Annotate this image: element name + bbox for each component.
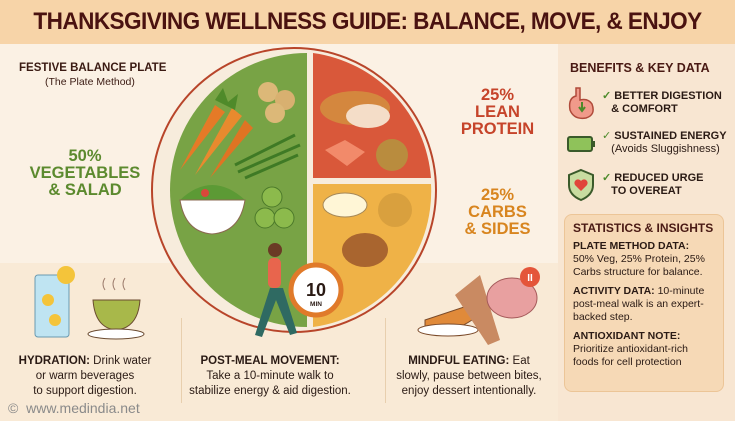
- label: 25% carbs: CARBS: [468, 203, 527, 221]
- text: post-meal movement: Take a 10-minute walk to: [206, 370, 334, 382]
- label: 25% carbs: & SIDES: [464, 220, 531, 238]
- benefit: digestion: & COMFORT: [611, 103, 678, 115]
- label: 50% vegetables: VEGETABLES: [30, 164, 140, 182]
- label: 25% lean protein: 25%: [481, 86, 514, 104]
- text: hydration: [19, 355, 152, 397]
- label: 25% carbs: 25%: [481, 186, 514, 204]
- food: sprouts: [255, 187, 294, 228]
- text: hydration: or warm beverages: [36, 370, 134, 382]
- benefit: overeat: ✓ REDUCED URGE: [602, 172, 704, 184]
- benefit: overeat: TO OVEREAT: [611, 185, 682, 197]
- label: 50% vegetables: [30, 147, 140, 199]
- heading: benefits: BENEFITS & KEY DATA: [570, 61, 710, 75]
- benefit: overeat: [568, 168, 704, 202]
- header band: [0, 0, 735, 44]
- stat: plate method: 50% Veg, 25% Protein, 25% Carbs structure for balance.: [573, 253, 705, 278]
- benefit: energy: ✓ SUSTAINED ENERGY: [602, 130, 727, 142]
- text: mindful eating: enjoy dessert intentionally.: [402, 385, 536, 397]
- stat: plate method: PLATE METHOD DATA:: [573, 240, 689, 252]
- label: 25% lean protein: [461, 86, 534, 138]
- label: 25% lean protein: PROTEIN: [461, 120, 534, 138]
- food: salmon and lentils: [325, 139, 408, 171]
- bottom band background: [0, 263, 558, 421]
- text: post-meal movement: POST-MEAL MOVEMENT:: [200, 355, 340, 367]
- label: 25% carbs: [464, 186, 531, 238]
- heading: festive balance plate: FESTIVE BALANCE PLATE: [19, 62, 166, 74]
- stopwatch 10 min: 10: [306, 280, 326, 300]
- food: potatoes: [258, 82, 295, 123]
- label: 50% vegetables: & SALAD: [48, 181, 122, 199]
- text: hydration: HYDRATION: Drink water: [19, 355, 151, 367]
- icon: water glass: [35, 266, 75, 337]
- text: hydration: to support digestion.: [33, 385, 137, 397]
- subheading: (The Plate Method): [45, 76, 135, 88]
- stopwatch 10 min: MIN: [310, 301, 322, 308]
- label: 25% lean protein: LEAN: [475, 103, 520, 121]
- stopwatch 10 min: [291, 265, 341, 315]
- food: mashed potatoes, stuffing, bread: [323, 193, 412, 267]
- title: THANKSGIVING WELLNESS GUIDE: BALANCE, MOVE, & ENJOY: [33, 8, 702, 35]
- food: salad bowl: [180, 185, 245, 234]
- panel: statistics & insights: [564, 214, 724, 392]
- benefit: digestion: [568, 87, 722, 120]
- stat: antioxidant: ANTIOXIDANT NOTE:: [573, 330, 680, 342]
- text: post-meal movement: stabilize energy & aid digestion.: [189, 385, 351, 397]
- right panel background: [558, 44, 735, 421]
- stat: activity: ACTIVITY DATA: 10-minute post-meal walk is an expert-backed step.: [573, 285, 704, 323]
- text: mindful eating: slowly, pause between bites,: [396, 370, 542, 382]
- text: mindful eating: [396, 355, 542, 397]
- benefit: energy: [567, 130, 727, 155]
- runner figure: [255, 243, 297, 337]
- icon: tea cup: [88, 278, 144, 339]
- text: post-meal movement: [189, 355, 351, 397]
- footer credit: © www.medindia.net: [8, 400, 140, 416]
- stat: plate method: [573, 240, 705, 278]
- panel: benefits: [567, 61, 727, 202]
- plate: [34, 47, 540, 345]
- icon: pie, fork and brain: [418, 267, 540, 345]
- label: 50% vegetables: 50%: [68, 147, 102, 165]
- food: turkey: [320, 91, 390, 128]
- food: green beans: [235, 135, 300, 178]
- food: carrots: [180, 88, 253, 178]
- stat: antioxidant: Prioritize antioxidant-rich foods for cell protection: [573, 343, 688, 368]
- icon: pie, fork and brain: II: [527, 273, 533, 284]
- stat: antioxidant: [573, 330, 688, 368]
- benefit: digestion: ✓ BETTER DIGESTION: [602, 90, 722, 102]
- heading: statistics: STATISTICS & INSIGHTS: [573, 221, 713, 235]
- text: mindful eating: MINDFUL EATING: Eat: [408, 355, 530, 367]
- benefit: energy: (Avoids Sluggishness): [611, 143, 720, 155]
